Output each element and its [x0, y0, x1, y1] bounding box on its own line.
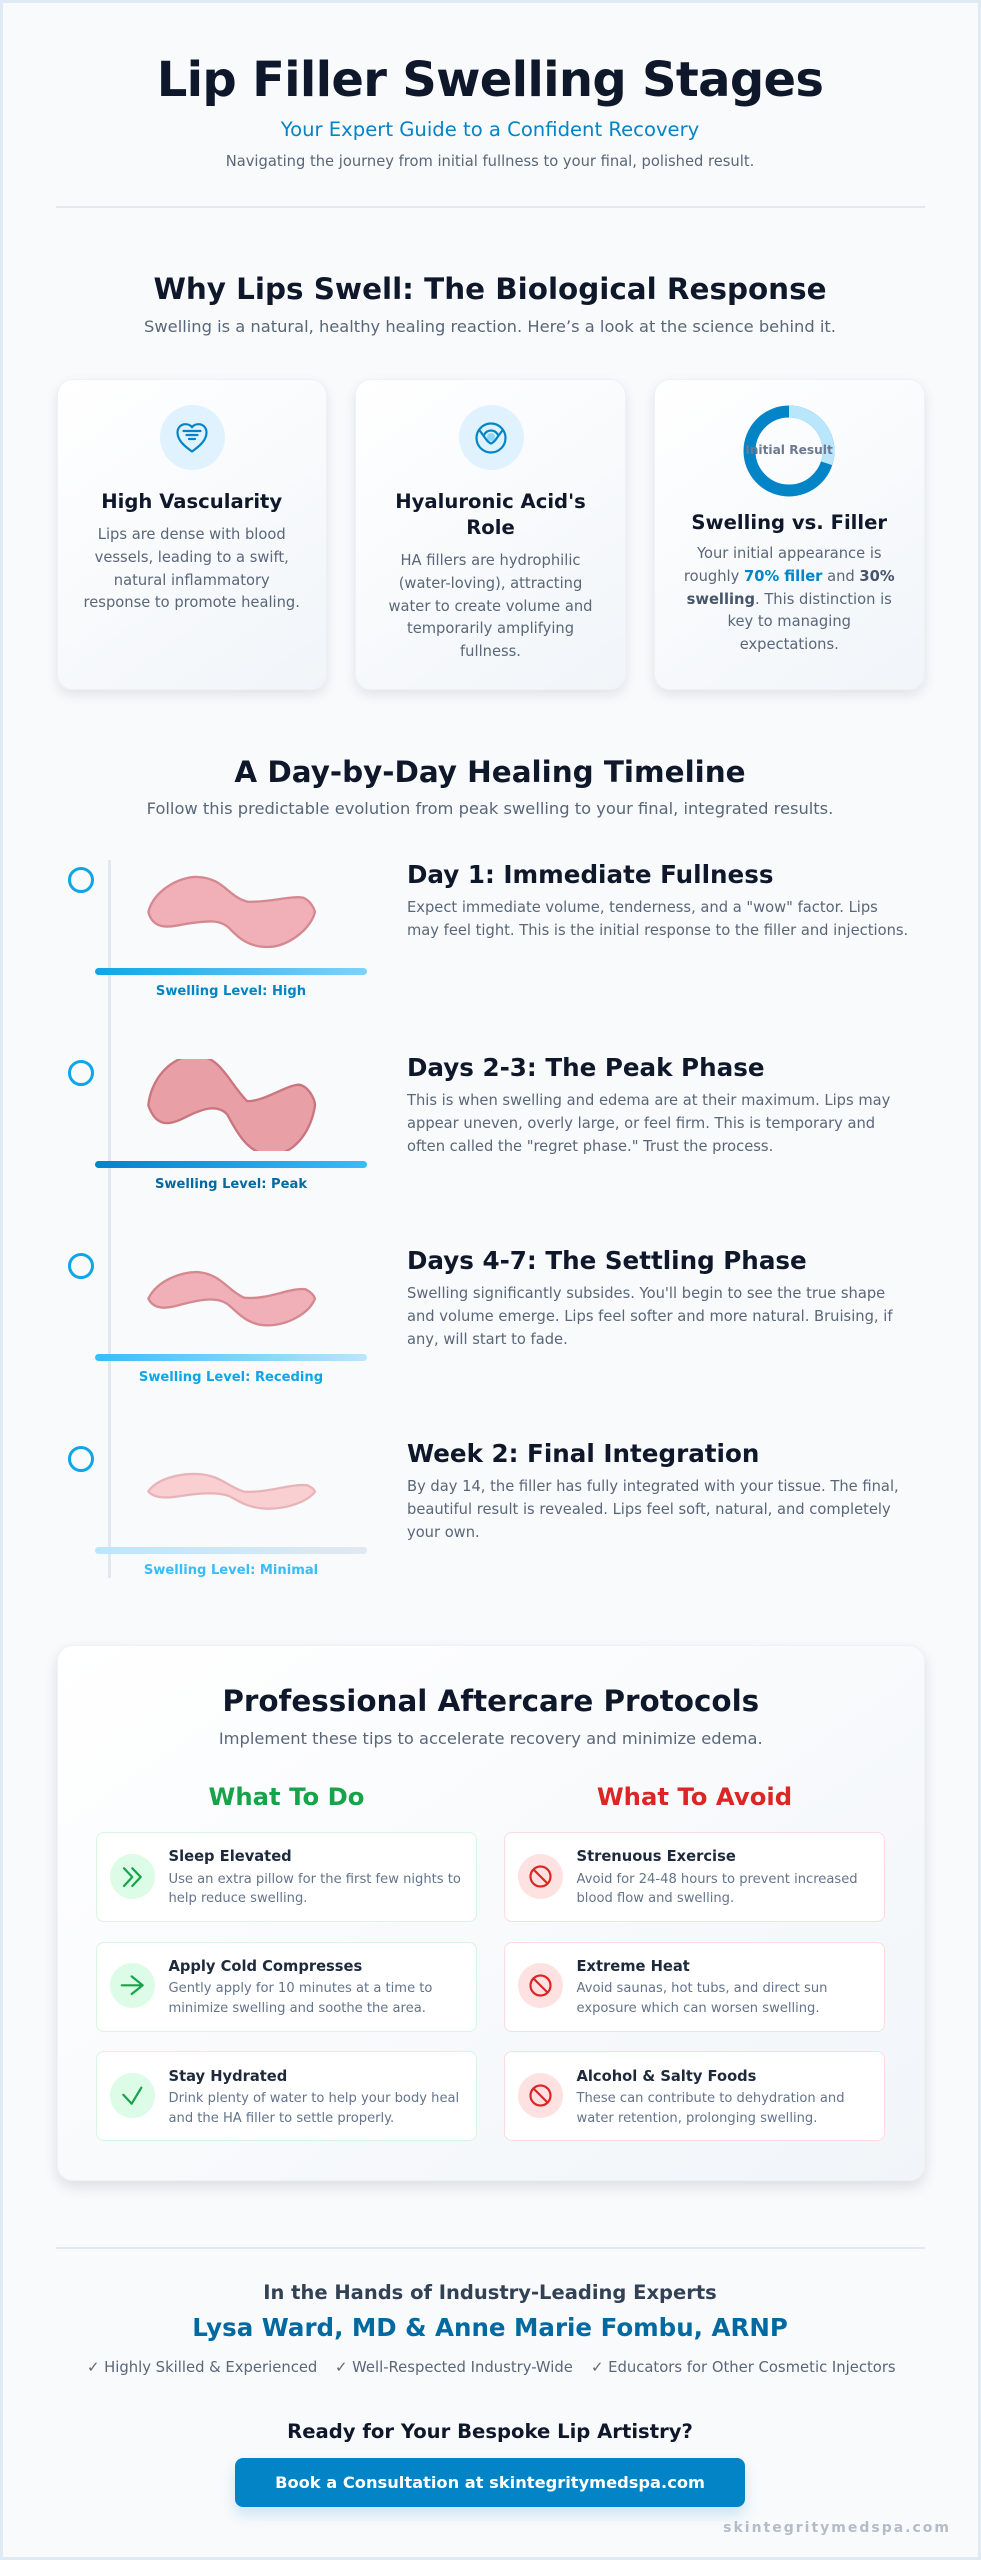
warning text — [576, 1981, 827, 2016]
swelling bar — [95, 968, 367, 974]
panel: swelling vs filler — [654, 378, 924, 690]
panel: hyaluronic acid — [355, 378, 626, 690]
column: what to do — [96, 1782, 477, 2141]
button: Book a Consultation at skintegritymedspa.com — [275, 2473, 705, 2492]
stage text: may feel tight. This is the initial response to the filler and injections. — [407, 922, 908, 939]
stage text — [406, 1092, 890, 1155]
card text: fullness. — [460, 643, 521, 660]
stage text: Swelling significantly subsides. You'll begin to see the true shape — [407, 1285, 885, 1302]
warning text — [576, 2091, 845, 2126]
card title — [395, 490, 586, 539]
card text: HA fillers are hydrophilic — [401, 552, 580, 569]
panel subtitle: Implement these tips to accelerate recovery and minimize edema. — [219, 1729, 763, 1748]
lips illustration: peak swelling — [147, 1059, 316, 1151]
icon: check — [110, 2073, 154, 2118]
heading: timeline — [147, 755, 833, 818]
card text: Your initial appearance is — [697, 545, 882, 562]
tip title: Stay Hydrated — [168, 2068, 287, 2085]
stage text: often called the "regret phase." Trust the process. — [407, 1138, 773, 1155]
cta heading: Ready for Your Bespoke Lip Artistry? — [287, 2420, 693, 2442]
tip: sleep elevated — [96, 1832, 477, 1922]
warning: extreme heat — [504, 1942, 885, 2032]
credential 2: ✓ Well-Respected Industry-Wide — [335, 2359, 573, 2376]
warning text: water retention, prolonging swelling. — [576, 2111, 817, 2126]
timeline stage: days 2-3 — [68, 1052, 890, 1192]
stage text: any, will start to fade. — [407, 1331, 568, 1348]
column heading: What To Avoid — [597, 1782, 792, 1811]
stage title: Days 2-3: The Peak Phase — [407, 1052, 765, 1082]
warning text — [576, 1872, 858, 1906]
warning title: Strenuous Exercise — [576, 1848, 736, 1865]
tip text — [168, 1981, 432, 2016]
tip text: Drink plenty of water to help your body heal — [168, 2091, 459, 2106]
section subtitle: Swelling is a natural, healthy healing reaction. Here’s a look at the science behind it. — [144, 317, 836, 336]
panel: aftercare protocols — [56, 1645, 925, 2181]
donut label: Initial Result — [745, 443, 833, 457]
credential 3: ✓ Educators for Other Cosmetic Injectors — [591, 2359, 896, 2376]
card title: Role — [466, 516, 515, 539]
stage title: Day 1: Immediate Fullness — [407, 860, 773, 888]
tip text: Gently apply for 10 minutes at a time to — [168, 1981, 432, 1996]
swelling bar — [95, 1161, 367, 1168]
card text: vessels, leading to a swift, — [95, 549, 289, 566]
section title: A Day-by-Day Healing Timeline — [234, 755, 746, 789]
card text: natural inflammatory — [114, 572, 270, 589]
warning: strenuous exercise — [504, 1832, 885, 1922]
lips illustration: receding swelling — [147, 1270, 316, 1326]
warning title: Alcohol & Salty Foods — [576, 2068, 756, 2085]
card text: key to managing — [728, 613, 851, 630]
panel title: Professional Aftercare Protocols — [222, 1684, 759, 1718]
card title: Swelling vs. Filler — [691, 511, 887, 534]
card text: (water-loving), attracting — [399, 575, 582, 592]
warning: alcohol and salty foods — [504, 2051, 885, 2141]
icon: ban — [518, 2073, 562, 2118]
icon: heart — [160, 405, 224, 470]
swelling bar — [95, 1354, 367, 1360]
marker — [68, 867, 94, 893]
icon: double chevron — [110, 1854, 154, 1898]
stage title: Days 4-7: The Settling Phase — [407, 1246, 807, 1274]
timeline stage: day 1 — [68, 860, 908, 998]
tip text: and the HA filler to settle properly. — [168, 2111, 394, 2126]
subtitle: Your Expert Guide to a Confident Recovery — [281, 118, 699, 141]
icon: ban — [518, 1963, 562, 2008]
section subtitle: Follow this predictable evolution from peak swelling to your final, integrated results. — [147, 799, 833, 818]
marker — [68, 1253, 94, 1279]
card text: roughly 70% filler and 30% — [684, 568, 895, 585]
column heading: What To Do — [209, 1782, 364, 1811]
stage text — [407, 899, 908, 939]
card title: High Vascularity — [101, 490, 282, 513]
call to action — [229, 2420, 751, 2521]
watermark: skintegritymedspa.com — [723, 2520, 951, 2536]
card text: response to promote healing. — [84, 594, 300, 611]
stage text — [407, 1285, 893, 1348]
tip: stay hydrated — [96, 2051, 477, 2141]
lips illustration: minimal swelling — [147, 1472, 316, 1510]
experts block — [87, 2281, 896, 2376]
heading: why lips swell — [144, 272, 836, 336]
donut chart: 70% filler, 30% swelling — [744, 406, 834, 496]
card text — [389, 552, 592, 660]
tip text: minimize swelling and soothe the area. — [168, 2001, 426, 2016]
warning text: These can contribute to dehydration and — [576, 2091, 845, 2106]
stage text — [407, 1478, 899, 1541]
marker — [68, 1446, 94, 1472]
card title: Hyaluronic Acid's — [395, 490, 586, 513]
lips illustration: high swelling — [147, 876, 316, 948]
icon: molecule — [458, 405, 524, 470]
header — [157, 52, 823, 170]
tip: cold compresses — [96, 1942, 477, 2032]
experts names: Lysa Ward, MD & Anne Marie Fombu, ARNP — [192, 2313, 788, 2342]
stage text: Expect immediate volume, tenderness, and a "wow" factor. Lips — [407, 899, 878, 916]
card text — [84, 526, 300, 611]
marker — [68, 1060, 94, 1086]
tip text — [168, 2091, 459, 2126]
swelling label: Swelling Level: Minimal — [144, 1562, 318, 1578]
card text: temporarily amplifying — [407, 620, 574, 637]
tip text: Use an extra pillow for the first few nights to — [168, 1872, 461, 1886]
stage title: Week 2: Final Integration — [407, 1438, 759, 1468]
icon: ban — [518, 1854, 562, 1898]
tip text: help reduce swelling. — [168, 1891, 307, 1906]
timeline stage: days 4-7 — [68, 1246, 893, 1384]
title: Lip Filler Swelling Stages — [157, 52, 823, 108]
panel: high vascularity — [56, 378, 327, 690]
stage text: By day 14, the filler has fully integrated with your tissue. The final, — [407, 1478, 899, 1495]
tagline: Navigating the journey from initial fullness to your final, polished result. — [226, 153, 754, 170]
button — [235, 2458, 745, 2507]
tip title: Sleep Elevated — [168, 1848, 292, 1865]
warning title: Extreme Heat — [576, 1958, 690, 1975]
swelling bar — [95, 1547, 367, 1554]
card text — [684, 545, 895, 653]
swelling label: Swelling Level: Peak — [155, 1176, 307, 1192]
column: what to avoid — [504, 1782, 885, 2141]
card text: water to create volume and — [389, 598, 592, 615]
stage text: and volume emerge. Lips feel softer and more natural. Bruising, if — [407, 1308, 892, 1325]
warning text: Avoid saunas, hot tubs, and direct sun — [576, 1981, 827, 1996]
tip title: Apply Cold Compresses — [168, 1958, 362, 1975]
warning text: Avoid for 24-48 hours to prevent increased — [576, 1872, 858, 1886]
warning text: blood flow and swelling. — [576, 1891, 734, 1906]
icon: arrow — [110, 1963, 154, 2008]
card text: expectations. — [740, 636, 839, 653]
experts heading: In the Hands of Industry-Leading Experts — [263, 2281, 717, 2304]
swelling label: Swelling Level: High — [156, 984, 306, 998]
stage text: your own. — [407, 1524, 480, 1541]
swelling label: Swelling Level: Receding — [139, 1370, 323, 1384]
stage text: This is when swelling and edema are at their maximum. Lips may — [407, 1092, 890, 1109]
card text: Lips are dense with blood — [98, 526, 286, 543]
section title: Why Lips Swell: The Biological Response — [153, 272, 827, 306]
card text: swelling. This distinction is — [687, 591, 892, 608]
tip text — [168, 1872, 461, 1906]
stage text: beautiful result is revealed. Lips feel soft, natural, and completely — [407, 1501, 891, 1518]
warning text: exposure which can worsen swelling. — [576, 2001, 820, 2016]
timeline stage: week 2 — [68, 1438, 899, 1578]
stage text: appear uneven, overly large, or feel firm. This is temporary and — [407, 1115, 875, 1132]
credential 1: ✓ Highly Skilled & Experienced — [87, 2359, 317, 2376]
